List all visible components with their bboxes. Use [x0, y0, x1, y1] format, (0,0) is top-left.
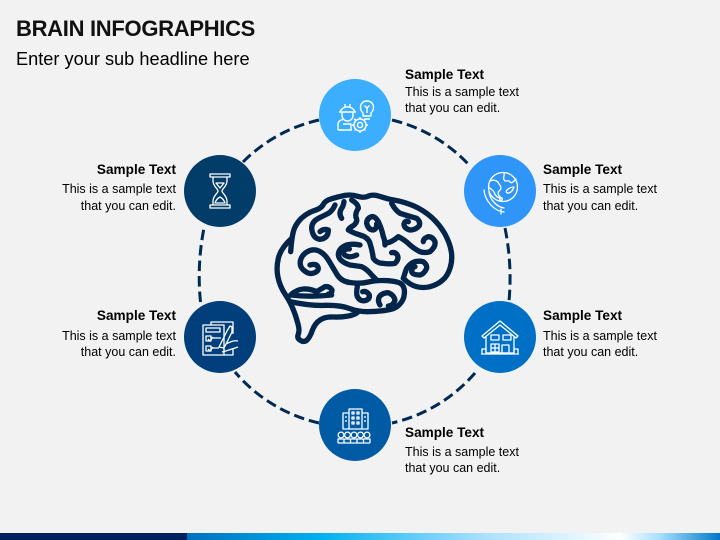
text block: step 2: Sample Text — [543, 162, 622, 177]
text block: step 2: This is a sample text — [543, 182, 657, 196]
dashed ring — [199, 120, 510, 423]
text block: step 4: that you can edit. — [405, 461, 500, 475]
text block: step 1 — [405, 67, 519, 115]
text block: step 3: This is a sample text — [543, 328, 657, 342]
text block: step 4: This is a sample text — [405, 444, 519, 458]
title: BRAIN INFOGRAPHICS — [16, 16, 255, 41]
text block: step 1: that you can edit. — [405, 101, 500, 115]
brain illustration — [277, 195, 452, 341]
text block: step 1: This is a sample text — [405, 84, 519, 98]
text block: step 4: Sample Text — [405, 425, 484, 440]
icon: checklist and pen — [203, 322, 238, 355]
text block: step 2: that you can edit. — [543, 198, 638, 212]
text block: step 6: Sample Text — [97, 162, 176, 177]
text block: step 5: Sample Text — [97, 308, 176, 323]
text block: step 6: This is a sample text — [62, 182, 176, 196]
icon: house — [481, 321, 519, 354]
subtitle: Enter your sub headline here — [16, 49, 250, 69]
text block: step 1: Sample Text — [405, 67, 484, 82]
step 5 circle: checklist icon — [184, 301, 256, 373]
text block: step 5: This is a sample text — [62, 328, 176, 342]
text block: step 2 — [543, 162, 657, 212]
step 6 circle: hourglass icon — [184, 155, 256, 227]
text block: step 6 — [62, 162, 176, 212]
text block: step 3: that you can edit. — [543, 345, 638, 359]
text block: step 5: that you can edit. — [81, 345, 176, 359]
step 3 circle: house icon — [464, 301, 536, 373]
text block: step 4 — [405, 425, 519, 475]
step 1 circle: worker and idea icon — [319, 79, 391, 151]
step 2 circle: globe icon — [464, 155, 536, 227]
icon: worker, gear and bulb — [338, 101, 374, 133]
text block: step 3: Sample Text — [543, 308, 622, 323]
text block: step 3 — [543, 308, 657, 359]
icon: buildings and crowd — [338, 409, 370, 443]
icon: globe on stand — [484, 172, 518, 214]
step 4 circle: buildings and people icon — [319, 389, 391, 461]
footer gradient bar — [0, 533, 720, 540]
text block: step 6: that you can edit. — [81, 198, 176, 212]
text block: step 5 — [62, 308, 176, 359]
icon: hourglass — [210, 174, 230, 208]
